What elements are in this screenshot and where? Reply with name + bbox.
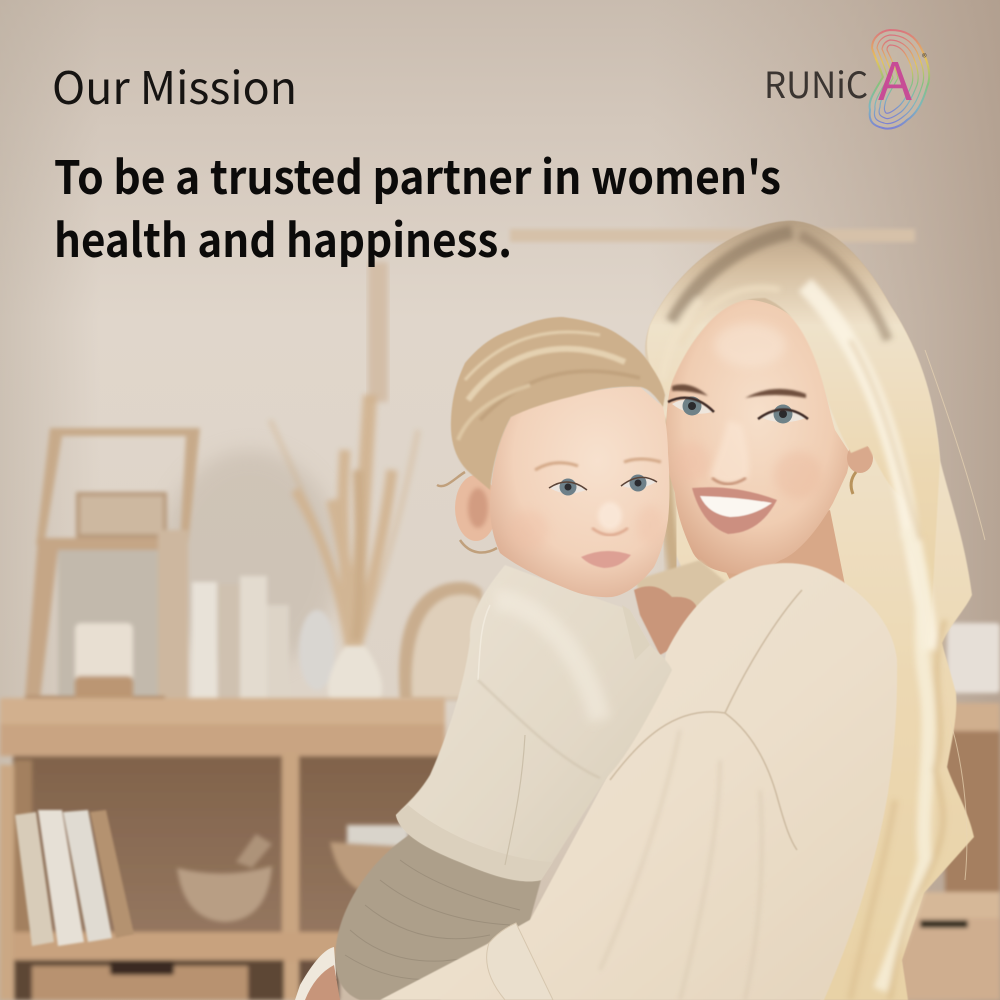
mother: eyebrows [672,384,806,398]
mother: earring [851,472,856,494]
shelf decor: round plate [399,582,482,700]
wooden shelving unit [0,698,445,1000]
mother: sleeve cuff [487,923,553,1000]
baby: hair [451,317,665,490]
shelf decor: picture frames [25,428,200,706]
mother: face [665,300,873,574]
baby: ear [455,475,497,541]
mother: nose [710,420,749,484]
mother: neck [715,510,845,590]
baby: right eye [621,474,657,492]
shelf contents: mortar bowl [177,834,272,922]
baby: pants [335,833,541,1000]
mother: hair behind [645,221,974,1000]
shelf contents: basket [330,825,409,892]
mother: left eye [668,396,714,416]
baby: eyebrows [535,459,661,470]
baby: sock and foot [295,947,340,1000]
logo: RUNiCA [764,30,929,129]
shelf decor: white books [192,576,289,710]
mission statement: To be a trusted partner in women's [54,142,781,208]
mother: ear [847,443,873,473]
mother: right eye [758,404,808,424]
logo: registered mark: ® [922,49,927,64]
shelf decor: vase [299,610,382,706]
mission statement [54,142,781,271]
shelf decor: candle [75,623,133,715]
shelf decor: dried pampas grass in vase [270,395,418,650]
mother: front hair strands [647,221,985,1000]
logo: wordmark: RUNiC [764,57,868,109]
mission label: Our Mission [52,52,297,117]
baby: head [437,317,670,597]
area behind baby chin [635,560,735,640]
baby: sleeve highlights and seams [495,600,600,720]
mother: cream sweater [380,563,897,1000]
baby: sweater hem [396,805,553,881]
mother: smile [692,487,777,534]
mother: armhole seam and gathers [600,590,802,1000]
logo: wave swirl [870,30,929,129]
baby: nose [592,502,628,535]
shelf contents: leaning books [15,810,134,946]
baby: sweater [396,565,672,881]
mission statement: health and happiness. [54,205,512,271]
baby: mouth [581,551,631,568]
baby: left eye [549,478,587,496]
baby: hand on shoulder [634,586,698,655]
right side cabinet [900,623,1000,1000]
logo: letter A: A [878,40,912,115]
